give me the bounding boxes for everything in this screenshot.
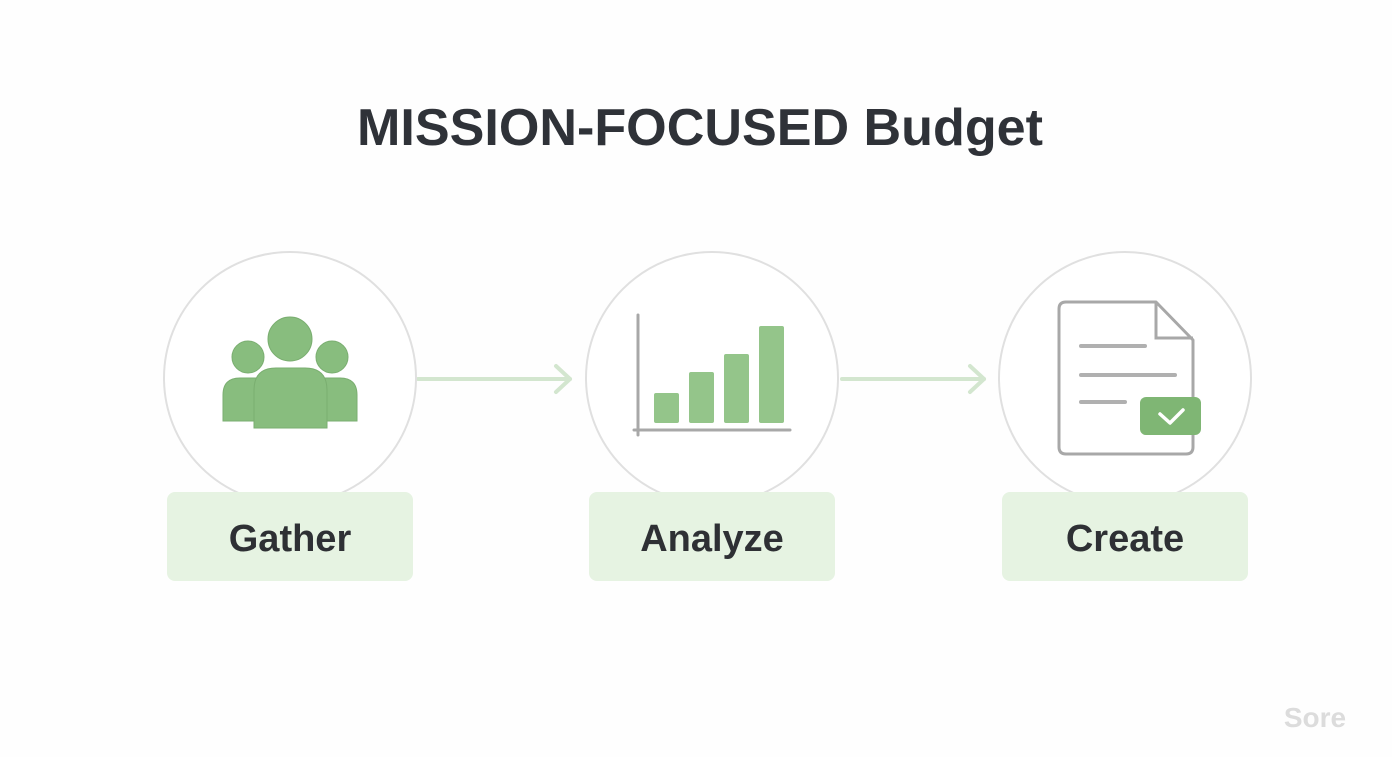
title: MISSION-FOCUSED Budget <box>357 99 1043 157</box>
label: create: Create <box>1066 518 1184 560</box>
arrow: gather to analyze <box>418 366 570 392</box>
label: analyze <box>589 492 835 581</box>
icon: people <box>223 317 357 428</box>
label: gather: Gather <box>229 518 351 560</box>
step: create <box>999 252 1251 581</box>
step: analyze <box>586 252 838 581</box>
step: gather <box>164 252 416 581</box>
icon: bar chart <box>634 315 790 435</box>
label: create <box>1002 492 1248 581</box>
label: gather <box>167 492 413 581</box>
arrow: analyze to create <box>842 366 984 392</box>
icon: document with check <box>1059 302 1201 454</box>
label: analyze: Analyze <box>640 518 784 560</box>
watermark: Sore <box>1284 702 1346 733</box>
